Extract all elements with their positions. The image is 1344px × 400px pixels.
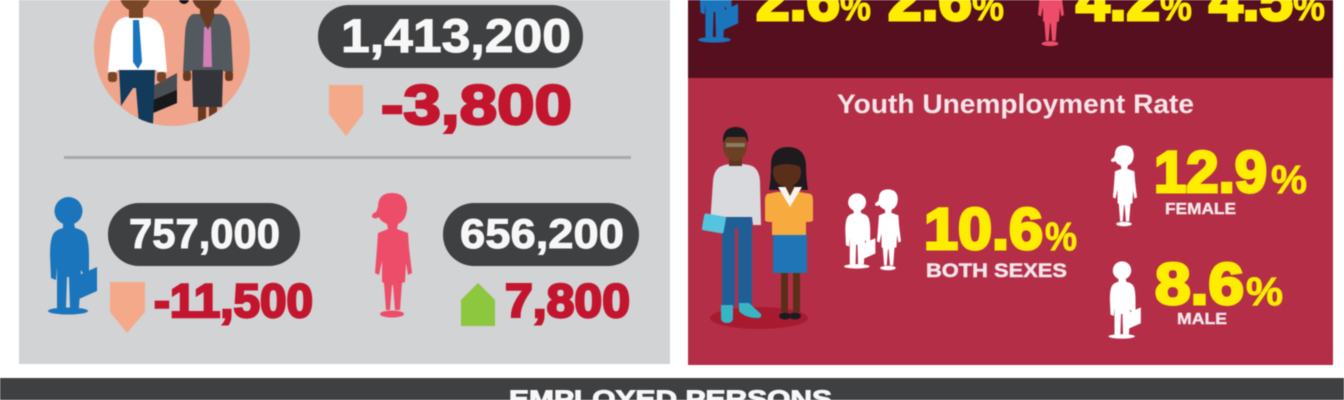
- youth heading: Youth Unemployment Rate: [837, 89, 1194, 119]
- icon: both sexes: [844, 189, 901, 270]
- total employed pill: 1,413,200: [341, 9, 571, 62]
- male change: -11,500: [154, 274, 313, 327]
- male rate: 8.6: [1155, 252, 1244, 317]
- male rate: [1155, 252, 1283, 317]
- female rate: 12.9: [1154, 140, 1267, 205]
- icon: male blue small: [698, 0, 738, 43]
- male rate two: [888, 0, 1004, 33]
- icon: male blue: [48, 197, 97, 314]
- male rate: %: [1246, 270, 1283, 314]
- icon: down arrow male: [110, 282, 145, 333]
- male label: MALE: [1177, 311, 1227, 328]
- icon: down arrow total: [329, 85, 363, 136]
- panel: youth unemployment: [688, 78, 1333, 365]
- female employed pill: 656,200: [460, 210, 624, 257]
- icon: female pink small: [1036, 0, 1064, 46]
- panel: employment totals: [19, 0, 670, 364]
- both sexes rate: %: [1045, 215, 1077, 259]
- icon: female white: [1111, 145, 1137, 226]
- icon: male white: [1109, 261, 1141, 339]
- section bar: employed persons: [0, 378, 1344, 400]
- divider: [64, 156, 631, 159]
- total change: -3,800: [381, 73, 572, 136]
- total employed pill: [318, 5, 583, 68]
- panel: unemployment rate: [688, 0, 1333, 78]
- female employed pill: [443, 203, 639, 266]
- female rate: %: [1271, 158, 1307, 202]
- both sexes label: BOTH SEXES: [926, 260, 1067, 282]
- female label: FEMALE: [1165, 201, 1236, 218]
- male employed pill: [108, 203, 300, 266]
- male employed pill: 757,000: [129, 210, 280, 257]
- icon: female pink: [372, 193, 412, 318]
- icon: employed man and woman in circle: [94, 0, 250, 126]
- female rate one: [1076, 0, 1192, 33]
- icon: up arrow female: [461, 283, 495, 326]
- both sexes rate: 10.6: [924, 197, 1043, 262]
- female rate two: [1209, 0, 1325, 33]
- female change: 7,800: [505, 274, 630, 327]
- illustration: young man and woman: [702, 127, 813, 329]
